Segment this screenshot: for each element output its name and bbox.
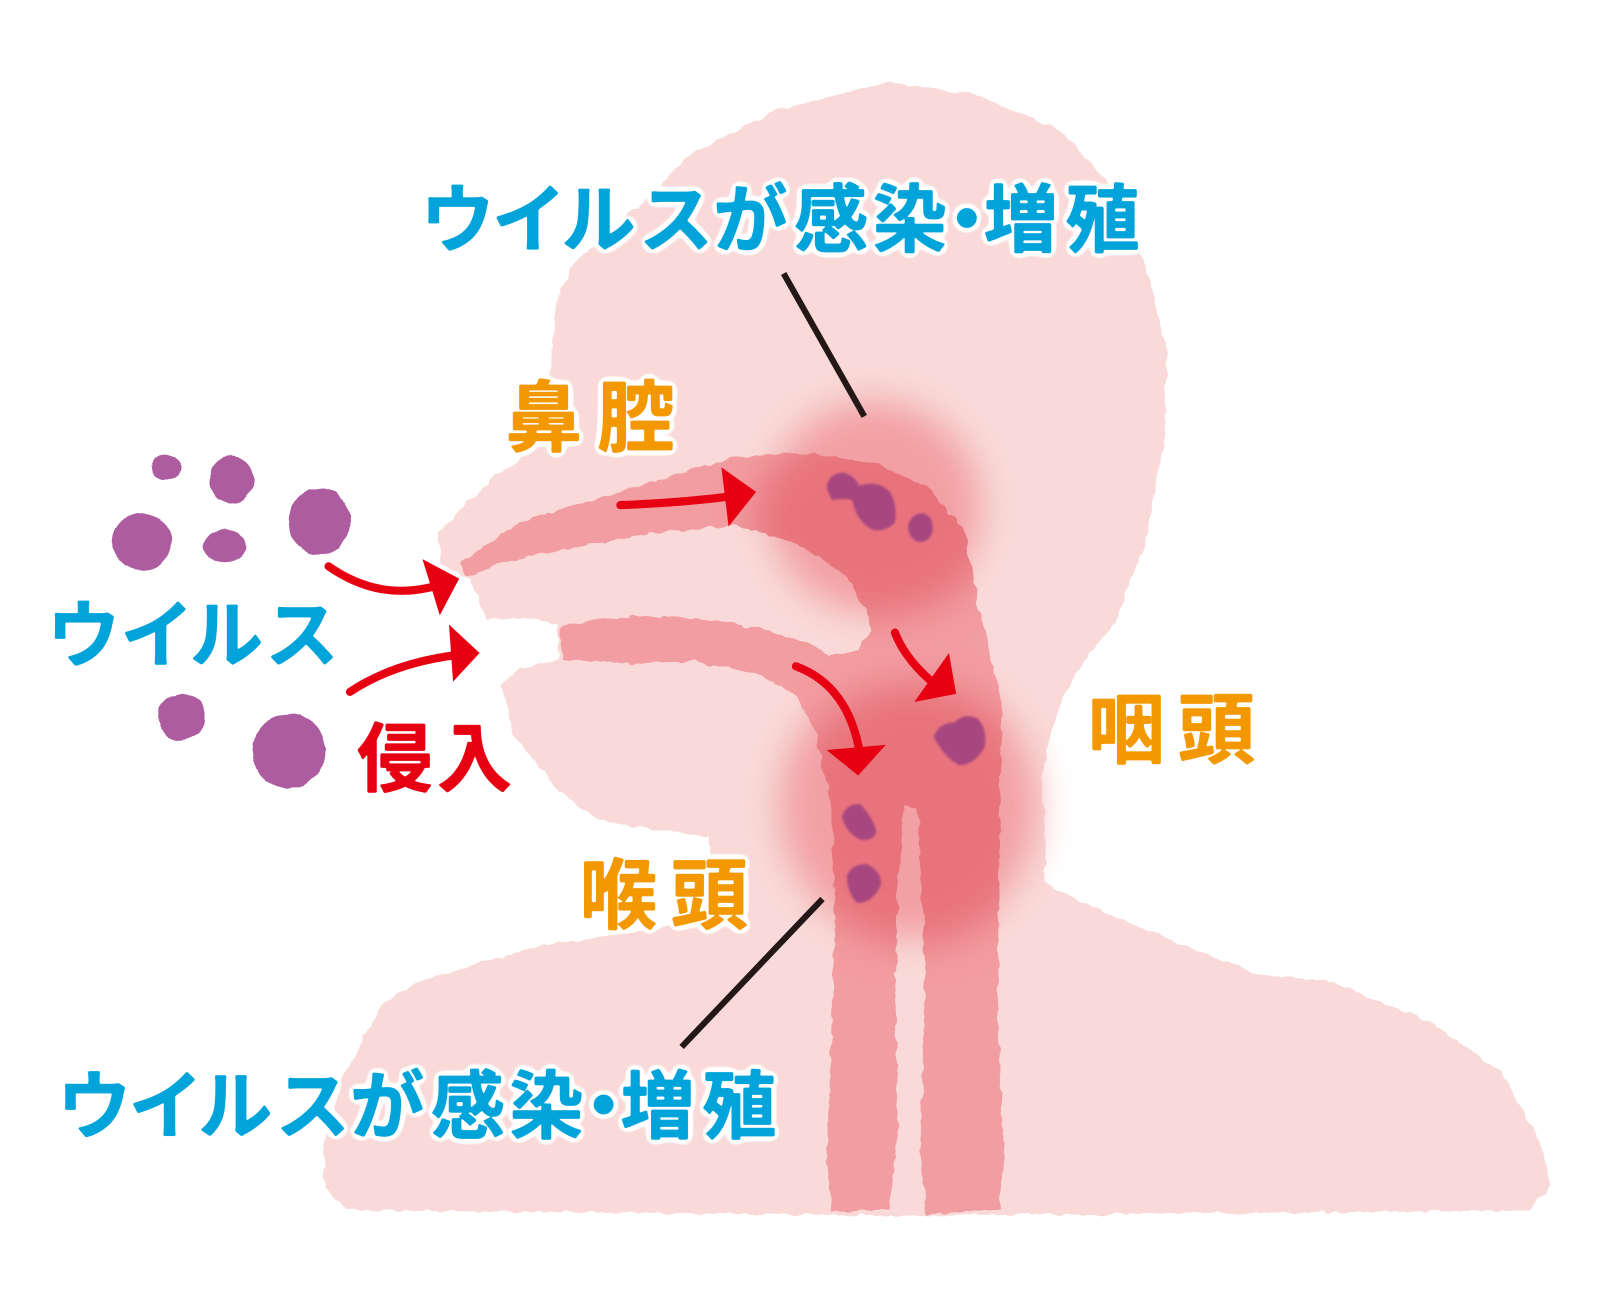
infected spots in the airway xyxy=(827,472,985,903)
callout: infection upper: ウイルスが感染・増殖 xyxy=(420,179,1140,262)
label: nasal cavity: 鼻腔 xyxy=(505,376,674,462)
label: larynx: 喉頭 xyxy=(580,853,748,939)
arrow: virus entering the mouth xyxy=(350,624,480,692)
infection glow around tissue xyxy=(768,401,1037,939)
arrow: down into the pharynx xyxy=(895,633,956,702)
label: pharynx: 咽頭 xyxy=(1088,688,1255,774)
infected region inside the airway xyxy=(740,452,1003,960)
airway: nasal cavity, pharynx, larynx, trachea and esophagus xyxy=(459,453,1004,1214)
arrow: through the nasal cavity xyxy=(620,467,756,527)
head and shoulders silhouette xyxy=(324,83,1549,1214)
arrow: virus entering the nose xyxy=(329,559,459,615)
leader line: upper infection callout xyxy=(784,273,864,416)
arrow: down into the larynx xyxy=(796,666,886,776)
callout: infection lower: ウイルスが感染・増殖 xyxy=(57,1066,777,1149)
label: virus: ウイルス xyxy=(47,594,339,677)
virus particles xyxy=(112,454,350,788)
leader line: lower infection callout xyxy=(682,899,822,1047)
label: invasion: 侵入 xyxy=(357,719,512,803)
